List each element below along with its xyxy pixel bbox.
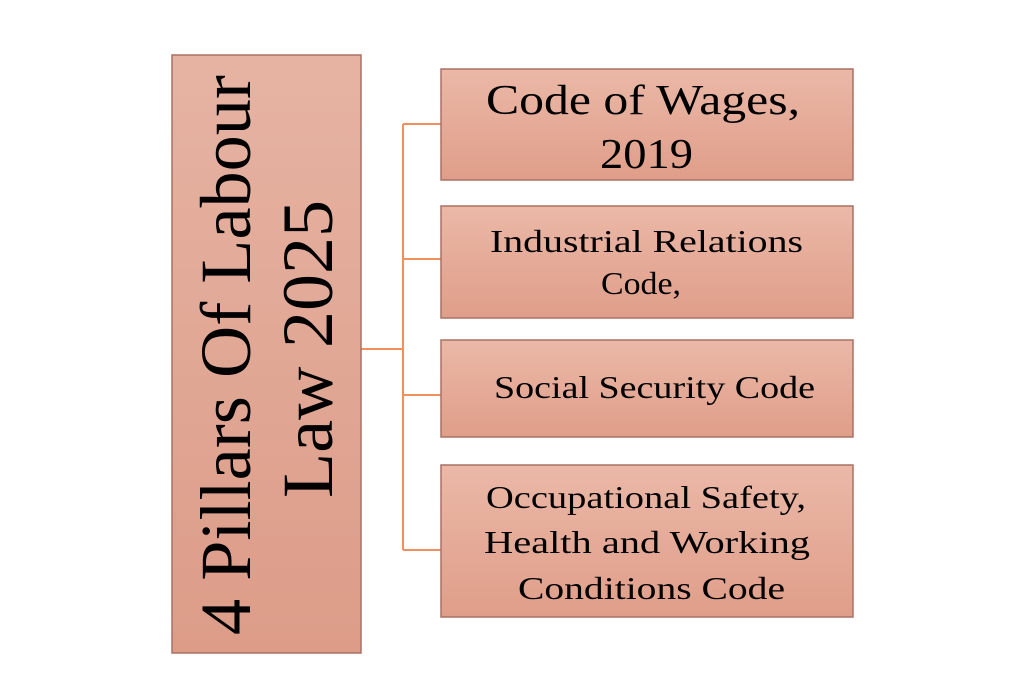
- title: [186, 75, 348, 635]
- panel: Occupational Safety code: [441, 465, 853, 617]
- panel: Occupational Safety code: Health and Working: [484, 524, 810, 560]
- panel: Code of Wages: [441, 69, 853, 180]
- panel: Code of Wages: 2019: [600, 132, 693, 178]
- title: Law 2025: [268, 200, 348, 498]
- panel: Industrial Relations Code: Industrial Relations: [490, 223, 803, 259]
- panel: Code of Wages: Code of Wages,: [486, 78, 800, 124]
- title: 4 Pillars Of Labour: [186, 75, 266, 635]
- connector lines: [361, 124, 441, 550]
- panel: Occupational Safety code: Occupational Safety,: [486, 479, 806, 515]
- panel: Social Security Code: [441, 340, 853, 437]
- panel: Industrial Relations Code: Code,: [601, 265, 681, 301]
- panel: Industrial Relations Code: [441, 206, 853, 318]
- panel: Occupational Safety code: Conditions Code: [518, 570, 785, 606]
- panel: main title box: [172, 55, 361, 653]
- panel: Social Security Code: Social Security Code: [494, 369, 815, 405]
